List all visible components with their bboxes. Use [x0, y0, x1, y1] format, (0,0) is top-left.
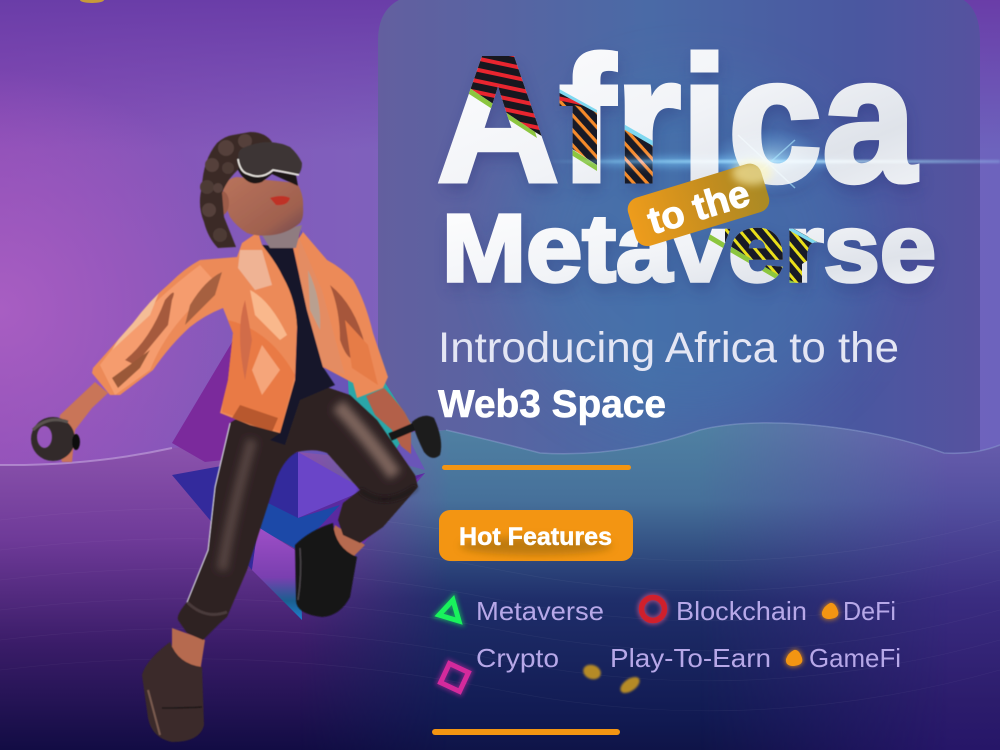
title: Africa [438, 50, 920, 193]
right controller [390, 416, 441, 458]
title: Metaverse: Metaverse [442, 195, 936, 302]
head [215, 177, 303, 236]
left forearm and hand [58, 382, 108, 462]
lower wave section [0, 400, 1000, 750]
panel: title card [378, 0, 980, 464]
icon: gold coins [581, 662, 642, 696]
subtitle [438, 324, 899, 426]
feature: Crypto: Crypto [476, 643, 559, 673]
subtitle: Introducing Africa to the [438, 324, 899, 372]
leggings [178, 378, 418, 640]
left shoe and ankle [142, 628, 205, 742]
wave edge [0, 423, 1000, 465]
title pattern: african stripes [468, 56, 653, 184]
title: Africa: Africa [439, 28, 920, 227]
feature: GameFi: GameFi [809, 643, 901, 673]
button: hot features [439, 510, 633, 561]
feature: DeFi: DeFi [843, 596, 896, 626]
right hand [366, 388, 411, 454]
title: Africa: Africa [437, 20, 918, 219]
lens flare [540, 128, 1000, 196]
left controller [31, 417, 80, 461]
shirt [262, 245, 335, 445]
icon: orange dot defi [822, 603, 838, 619]
icon: red circle [642, 598, 664, 620]
divider line top [442, 465, 631, 470]
character [31, 132, 441, 742]
icon: magenta square [441, 664, 468, 691]
feature: Metaverse: Metaverse [476, 596, 604, 626]
icon: green triangle [439, 600, 459, 621]
flare on badge [732, 161, 772, 185]
jacket [90, 230, 390, 435]
icon: ethereum diamond [172, 228, 425, 620]
subtitle: Web3 Space [438, 383, 666, 426]
divider line bottom [432, 729, 620, 735]
feature: Play-To-Earn: Play-To-Earn [610, 643, 771, 673]
button: hot features: Hot Features [459, 523, 612, 551]
neck [262, 225, 302, 248]
badge: to the: to the [643, 173, 755, 243]
VR headset [238, 142, 302, 186]
right shoe and ankle [295, 523, 365, 617]
feature: Blockchain: Blockchain [676, 596, 807, 626]
title: Metaverse: Metaverse [444, 203, 938, 310]
icon: orange dot gamefi [786, 650, 802, 666]
badge: to the [625, 161, 772, 249]
hair [200, 132, 272, 248]
title pattern: yellow stripes [708, 228, 828, 283]
feature list [439, 596, 901, 696]
